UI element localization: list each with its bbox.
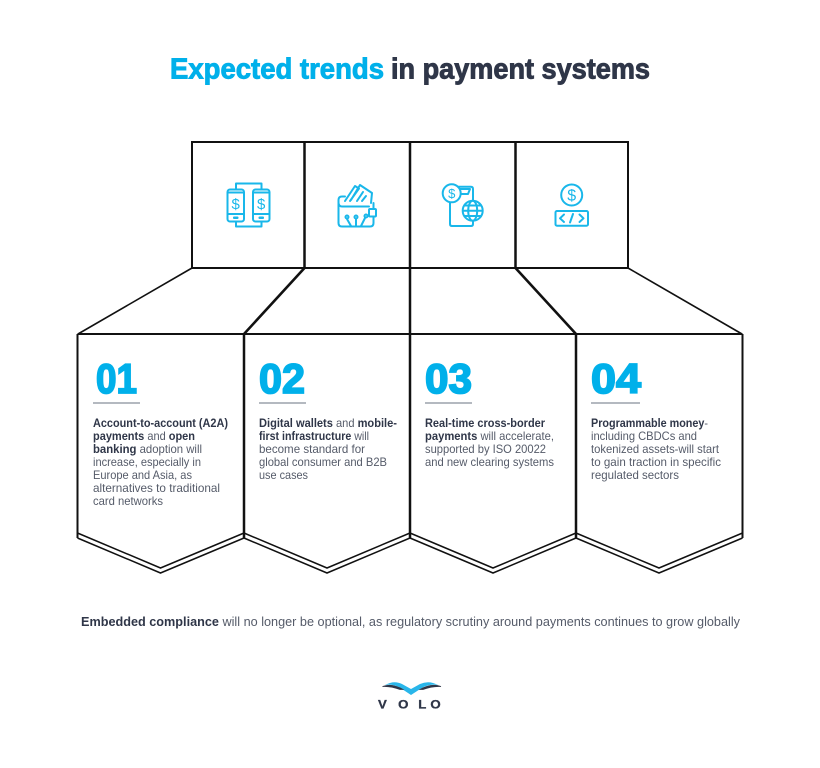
panel: 04: including CBDCs and [591,429,697,443]
panel: 04: Programmable money- [591,416,708,430]
icon: wallet with banknotes [338,185,376,226]
panel: 02: Digital wallets and mobile- [259,416,397,430]
panel: 02: first infrastructure will [259,429,369,443]
closing statement: Embedded compliance will no longer be optional, as regulatory scrutiny around payments continues to grow globally [81,615,741,629]
panel: 01 [93,355,228,508]
panel: 03 [425,355,554,469]
icon: two phones exchanging money: $ [257,196,266,213]
panel: 01: alternatives to traditional [93,481,220,495]
panel: 01: payments and open [93,429,195,443]
icon: two phones exchanging money: $ [232,196,241,213]
panel: 02: use cases [259,468,308,482]
panel: 02: become standard for [259,442,365,456]
panel: 01: Europe and Asia, as [93,468,192,482]
panel: 04: to gain traction in specific [591,455,721,469]
icon: phone with coin and globe: $ [448,186,456,201]
number 02: 02 [259,355,305,402]
icon: phone with coin and globe [443,184,483,226]
panel: 01: card networks [93,494,163,508]
panel: 04 [591,355,721,482]
title: in payment systems [391,54,650,86]
panel: 02: global consumer and B2B [259,455,387,469]
title [170,54,650,86]
panel: 02 [259,355,397,482]
panel: 03: payments will accelerate, [425,429,554,443]
number 01: 01 [96,355,137,402]
icon: two phones exchanging money [228,184,270,226]
panel: 01: increase, especially in [93,455,201,469]
logo: Volo: VOLO [378,698,441,711]
panel: 03: supported by ISO 20022 [425,442,546,456]
panel: 04: regulated sectors [591,468,679,482]
logo: Volo [378,682,441,711]
icon: coin above code block [556,184,588,226]
panel: 01: Account-to-account (A2A) [93,416,228,430]
panel: 01: banking adoption will [93,442,202,456]
number 04: 04 [591,355,642,402]
title: Expected trends [170,54,384,86]
number 03: 03 [425,355,472,402]
panel: 03: and new clearing systems [425,455,554,469]
panel: 03: Real-time cross-border [425,416,545,430]
icon: coin above code block: $ [567,188,576,204]
diagram outline [78,142,742,573]
panel: 04: tokenized assets-will start [591,442,720,456]
